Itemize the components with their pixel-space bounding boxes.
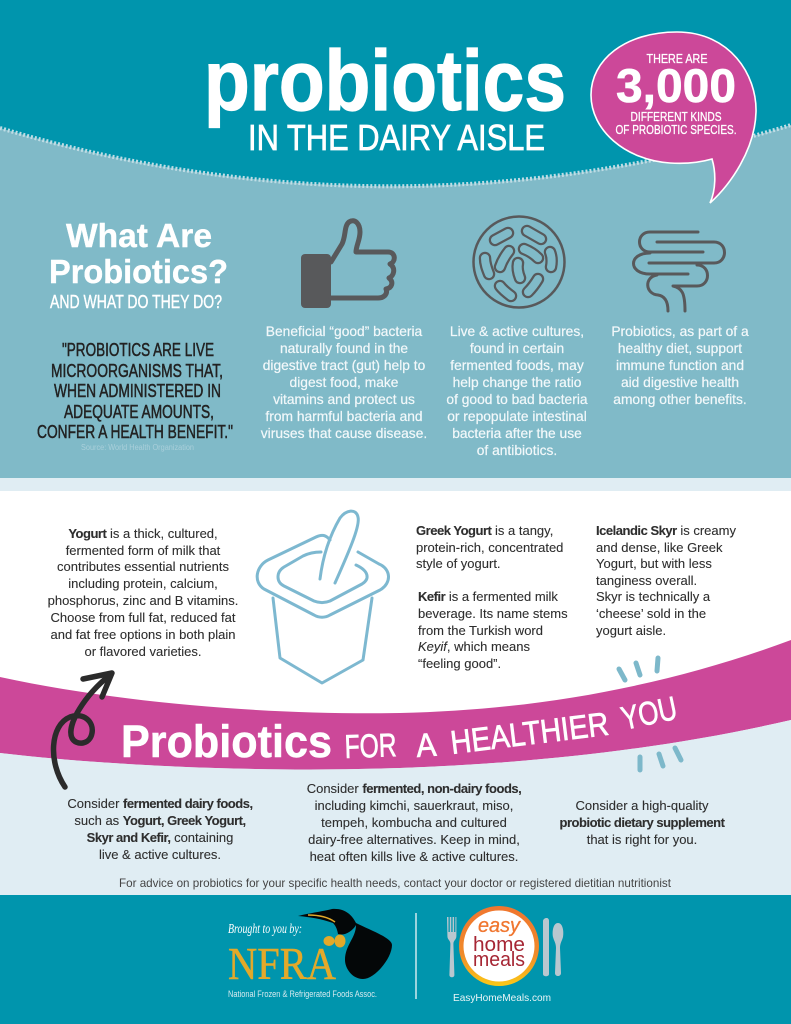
text block: icelandic skyr: [596, 523, 736, 638]
icon: fork: [447, 917, 456, 977]
text block: greek yogurt: [416, 523, 563, 571]
text block: greek yogurt: style of yogurt.: [416, 556, 501, 571]
text block: kefir: from the Turkish word: [418, 623, 543, 638]
logo: NFRA: [228, 909, 392, 999]
banner handwritten text: HEALTHIER: [448, 705, 611, 761]
text block: kefir: Keyif, which means: [418, 639, 530, 654]
banner handwritten text: FOR: [344, 726, 397, 765]
banner handwritten text: YOU: [618, 689, 680, 737]
text block: icelandic skyr: tanginess overall.: [596, 573, 697, 588]
text block: immune function: [611, 324, 749, 407]
text block: kefir: [418, 589, 568, 671]
banner heading: Probiotics: [121, 716, 332, 767]
text block: non-dairy foods: [307, 781, 521, 864]
quote: WHO definition: ADEQUATE AMOUNTS,: [64, 402, 214, 422]
text block: beneficial bacteria: digestive tract (gut) help to: [263, 358, 426, 373]
text block: non-dairy foods: tempeh, kombucha and cultured: [321, 815, 507, 830]
icon: yogurt cup with spoon: [257, 511, 389, 683]
text block: yogurt: Choose from full fat, reduced fat: [51, 610, 236, 625]
text block: live and active cultures: fermented foods, may: [450, 358, 584, 373]
arrow: [54, 673, 112, 787]
text block: immune function: aid digestive health: [621, 375, 739, 390]
panel: footer: [0, 895, 791, 1024]
panel: magenta banner: [0, 640, 791, 769]
heading: what are probiotics: [49, 218, 228, 312]
text block: live and active cultures: [446, 324, 588, 458]
logo: Easy Home Meals: meals: [473, 949, 525, 971]
text block: yogurt: or flavored varieties.: [84, 644, 202, 659]
text block: beneficial bacteria: vitamins and protect us: [273, 392, 415, 407]
text block: icelandic skyr: ‘cheese’ sold in the: [596, 606, 706, 621]
text block: non-dairy foods: dairy-free alternatives. Keep in mind,: [308, 832, 520, 847]
text block: yogurt: phosphorus, zinc and B vitamins.: [48, 593, 238, 608]
icon: knife: [543, 918, 549, 976]
text block: live and active cultures: help change the ratio: [453, 375, 582, 390]
text block: fermented dairy foods: live & active cultures.: [99, 847, 221, 862]
text block: live and active cultures: of good to bad bacteria: [446, 392, 588, 407]
text block: beneficial bacteria: digest food, make: [290, 375, 399, 390]
logo: Easy Home Meals: [447, 906, 563, 1004]
callout: 3,000 species speech bubble: DIFFERENT KINDS: [630, 109, 722, 124]
quote: WHO definition: [37, 340, 233, 452]
subtitle: IN THE DAIRY AISLE: [248, 117, 545, 158]
title: probiotics: [204, 34, 566, 129]
icon: bacteria culture: [474, 216, 564, 308]
banner heading: [121, 689, 680, 767]
text block: live and active cultures: or repopulate intestinal: [447, 409, 587, 424]
text block: live and active cultures: Live & active cultures,: [450, 324, 584, 339]
text block: yogurt: [48, 526, 238, 659]
title: [204, 34, 566, 158]
text block: immune function: Probiotics, as part of a: [611, 324, 749, 339]
icon: spoon: [553, 923, 563, 976]
text block: immune function: healthy diet, support: [618, 341, 742, 356]
text block: dietary supplement: probiotic dietary supplement: [560, 815, 726, 830]
text block: fermented dairy foods: [67, 796, 253, 862]
text block: dietary supplement: Consider a high-quality: [576, 798, 709, 813]
text block: fermented dairy foods: Consider fermented dairy foods,: [67, 796, 253, 811]
text block: icelandic skyr: Skyr is technically a: [596, 589, 711, 604]
text block: yogurt: Yogurt is a thick, cultured,: [68, 526, 218, 541]
callout: 3,000 species speech bubble: [591, 32, 756, 203]
text block: icelandic skyr: yogurt aisle.: [596, 623, 666, 638]
quote: WHO definition: CONFER A HEALTH BENEFIT.": [37, 422, 233, 442]
text block: beneficial bacteria: naturally found in the: [280, 341, 408, 356]
text block: live and active cultures: bacteria after the use: [452, 426, 582, 441]
divider: [415, 913, 417, 999]
source: Source: World Health Organization: [81, 443, 194, 452]
text block: beneficial bacteria: [261, 324, 427, 441]
text block: kefir: Kefir is a fermented milk: [418, 589, 558, 604]
text block: fermented dairy foods: Skyr and Kefir, containing: [87, 830, 233, 845]
text block: dietary supplement: [560, 798, 726, 847]
text block: greek yogurt: Greek Yogurt is a tangy,: [416, 523, 553, 538]
text block: non-dairy foods: heat often kills live & active cultures.: [310, 849, 518, 864]
text block: kefir: beverage. Its name stems: [418, 606, 568, 621]
panel: what are probiotics background: [0, 100, 791, 478]
text block: immune function: immune function and: [616, 358, 744, 373]
decorative ticks bottom: [640, 748, 681, 770]
text block: live and active cultures: of antibiotics.: [477, 443, 557, 458]
icon: thumbs up: [301, 221, 394, 308]
text block: beneficial bacteria: Beneficial “good” bacteria: [266, 324, 423, 339]
quote: WHO definition: "PROBIOTICS ARE LIVE: [62, 340, 214, 360]
quote: WHO definition: MICROORGANISMS THAT,: [51, 361, 223, 381]
text block: yogurt: and fat free options in both plain: [50, 627, 236, 642]
icon: intestines: [634, 232, 724, 311]
text block: icelandic skyr: and dense, like Greek: [596, 540, 723, 555]
callout: 3,000 species speech bubble: 3,000: [616, 59, 736, 112]
text block: immune function: among other benefits.: [613, 392, 747, 407]
callout: 3,000 species speech bubble: OF PROBIOTIC SPECIES.: [616, 122, 736, 137]
logo: NFRA: NFRA: [228, 938, 336, 989]
logo: NFRA: Brought to you by:: [228, 922, 302, 937]
text block: beneficial bacteria: viruses that cause disease.: [261, 426, 427, 441]
text block: non-dairy foods: Consider fermented, non-dairy foods,: [307, 781, 521, 796]
text block: kefir: “feeling good”.: [418, 656, 501, 671]
heading: what are probiotics: What Are: [66, 218, 212, 255]
heading: what are probiotics: Probiotics?: [49, 254, 228, 291]
text block: greek yogurt: protein-rich, concentrated: [416, 540, 563, 555]
icon: penguin: [298, 909, 392, 979]
text block: yogurt: contributes essential nutrients: [57, 559, 229, 574]
text block: live and active cultures: found in certain: [470, 341, 564, 356]
advice line: For advice on probiotics for your specific health needs, contact your doctor or registered dietitian nutritionist: [119, 876, 672, 890]
callout: 3,000 species speech bubble: THERE ARE: [646, 51, 708, 66]
panel: header background: [0, 0, 791, 186]
logo: Easy Home Meals: home: [473, 934, 525, 956]
text block: yogurt: including protein, calcium,: [68, 576, 218, 591]
banner handwritten text: A: [415, 726, 437, 764]
text block: dietary supplement: that is right for you.: [587, 832, 697, 847]
panel: white dairy section: [0, 491, 791, 731]
logo: NFRA: National Frozen & Refrigerated Foods Assoc.: [228, 989, 377, 999]
subheading: AND WHAT DO THEY DO?: [50, 292, 222, 312]
banner handwritten text: [344, 689, 680, 765]
text block: non-dairy foods: including kimchi, sauerkraut, miso,: [315, 798, 513, 813]
logo: Easy Home Meals: easy: [478, 915, 521, 937]
text block: yogurt: fermented form of milk that: [66, 543, 221, 558]
website: EasyHomeMeals.com: [453, 992, 551, 1004]
text block: beneficial bacteria: from harmful bacteria and: [265, 409, 423, 424]
text block: icelandic skyr: Icelandic Skyr is creamy: [596, 523, 736, 538]
quote: WHO definition: WHEN ADMINISTERED IN: [54, 381, 221, 401]
text block: fermented dairy foods: such as Yogurt, Greek Yogurt,: [74, 813, 246, 828]
text block: icelandic skyr: Yogurt, but with less: [596, 556, 712, 571]
decorative ticks top: [619, 658, 658, 680]
